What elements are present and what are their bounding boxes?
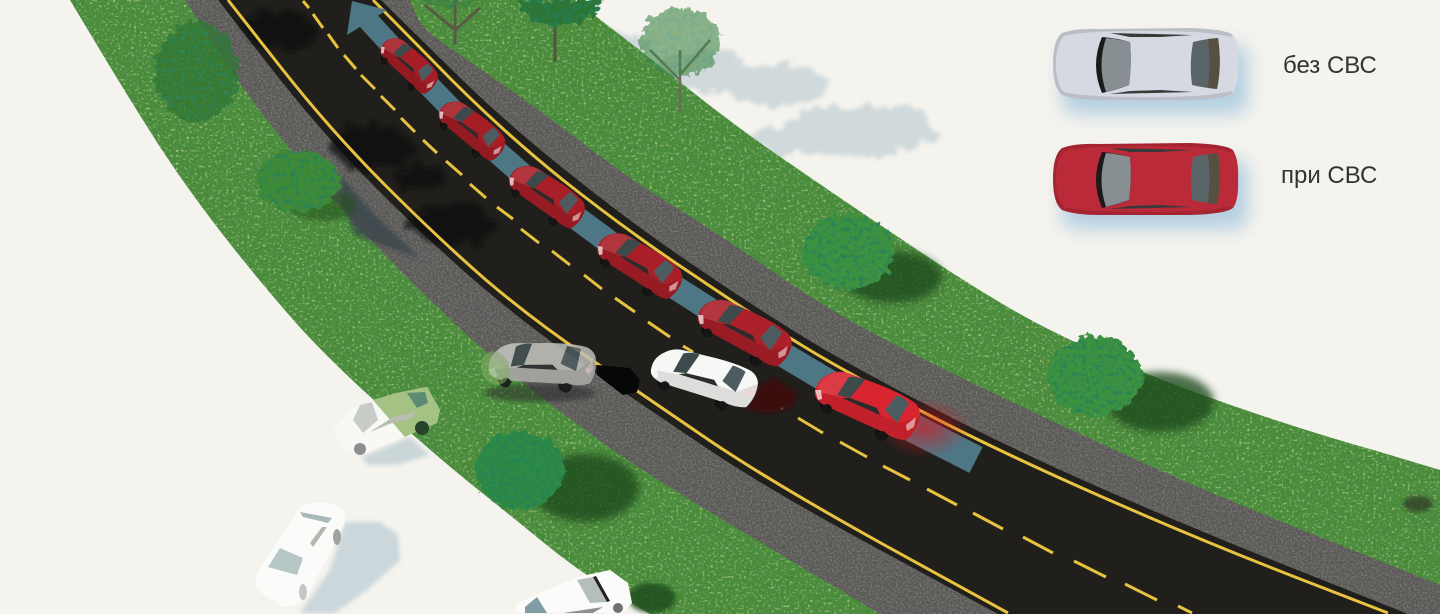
bush with shadow, upper left bbox=[256, 150, 356, 221]
shadow under parked car middle bbox=[362, 437, 430, 465]
left yellow edge line bbox=[228, 0, 1008, 613]
parked white car bottom left bbox=[256, 502, 345, 607]
road shadows from trees bbox=[240, 10, 494, 245]
shadow under parked car bottom left bbox=[300, 522, 400, 613]
brake glow and patches bbox=[484, 365, 971, 458]
tree at top bbox=[518, 0, 603, 62]
bush with shadow, centre right bbox=[802, 215, 942, 303]
red car 3 bbox=[502, 163, 591, 231]
parked white car, fading over grass bbox=[333, 387, 440, 455]
tree shadows on pavement bbox=[579, 32, 936, 156]
parked white car at bottom edge bbox=[515, 570, 632, 613]
bright red car 6 bbox=[815, 372, 920, 441]
ESC trajectory strip with arrow bbox=[347, 1, 976, 460]
red car 4 bbox=[591, 230, 687, 302]
legend: car with ESC bbox=[1053, 143, 1248, 229]
bush with shadow, right bbox=[1048, 336, 1214, 432]
ghost car leaving road bbox=[476, 317, 604, 418]
white car on road bbox=[649, 341, 760, 418]
legend label: with ESC: при СВС bbox=[1281, 162, 1377, 189]
red car 2 bbox=[431, 98, 512, 164]
legend label: without ESC: без СВС bbox=[1283, 52, 1377, 79]
small dark spot on right grass bbox=[1403, 496, 1433, 512]
shrub top left bbox=[155, 22, 239, 122]
bush with shadow, lower left bbox=[475, 431, 639, 522]
legend: car without ESC bbox=[1053, 28, 1248, 114]
centre dashed line bbox=[303, 1, 1192, 613]
red car 5 bbox=[694, 298, 794, 368]
right yellow edge line bbox=[373, 0, 1388, 613]
tree trunk at top bbox=[420, 0, 482, 45]
arrow head bbox=[347, 1, 387, 35]
red car 1 bbox=[372, 34, 445, 97]
tree right of road bbox=[640, 8, 720, 112]
shadow of bottom car on grass bbox=[628, 583, 676, 613]
shadow on left shoulder bbox=[340, 175, 420, 258]
